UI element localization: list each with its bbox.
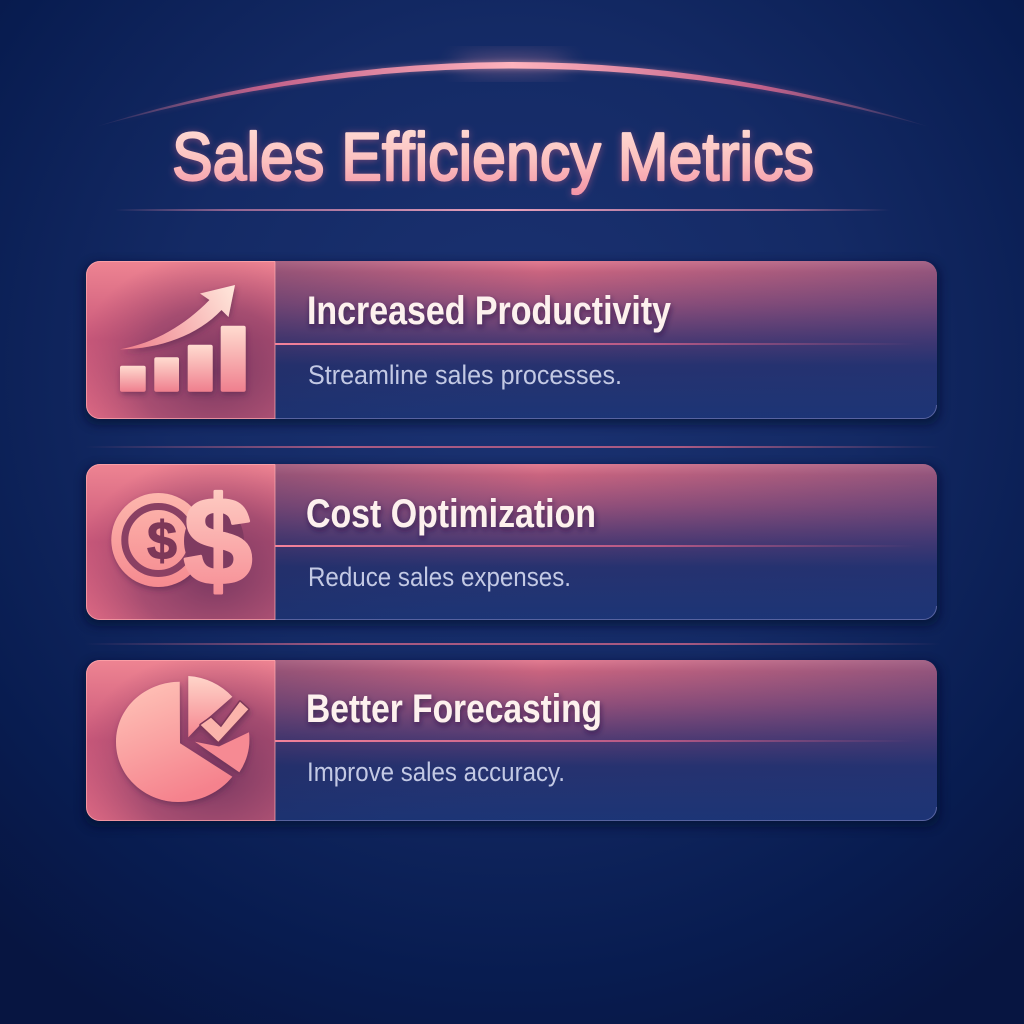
decorative glowing arc: [85, 58, 940, 130]
separator: [85, 643, 940, 645]
description: Improve sales accuracy.: [307, 757, 565, 787]
description: Streamline sales processes.: [308, 360, 622, 390]
card divider: [275, 740, 915, 742]
heading: Better Forecasting: [306, 687, 602, 731]
icon: coin and dollar sign: $: [147, 511, 177, 571]
card divider: [275, 545, 915, 547]
separator: [85, 446, 940, 448]
icon: pie chart with check mark: [116, 676, 249, 802]
title divider: [115, 209, 890, 211]
panel: better forecasting: [84, 660, 940, 827]
title: Sales Efficiency Metrics: [172, 119, 814, 195]
card left section: [86, 261, 275, 419]
panel: increased productivity: [84, 261, 940, 425]
card divider: [275, 343, 915, 345]
icon: coin and dollar sign: [111, 473, 252, 611]
heading: Increased Productivity: [307, 289, 672, 333]
card right section: [275, 464, 937, 620]
card right section: [275, 660, 937, 821]
card right section: [275, 261, 937, 419]
panel: cost optimization: [84, 464, 940, 626]
dark backing behind large dollar: [184, 505, 244, 577]
card left section: [86, 660, 275, 821]
card left section: [86, 464, 275, 620]
icon: rising bars and arrow: [120, 285, 246, 392]
heading: Cost Optimization: [306, 492, 596, 536]
description: Reduce sales expenses.: [308, 562, 571, 592]
icon: coin and dollar sign: $: [184, 473, 252, 611]
